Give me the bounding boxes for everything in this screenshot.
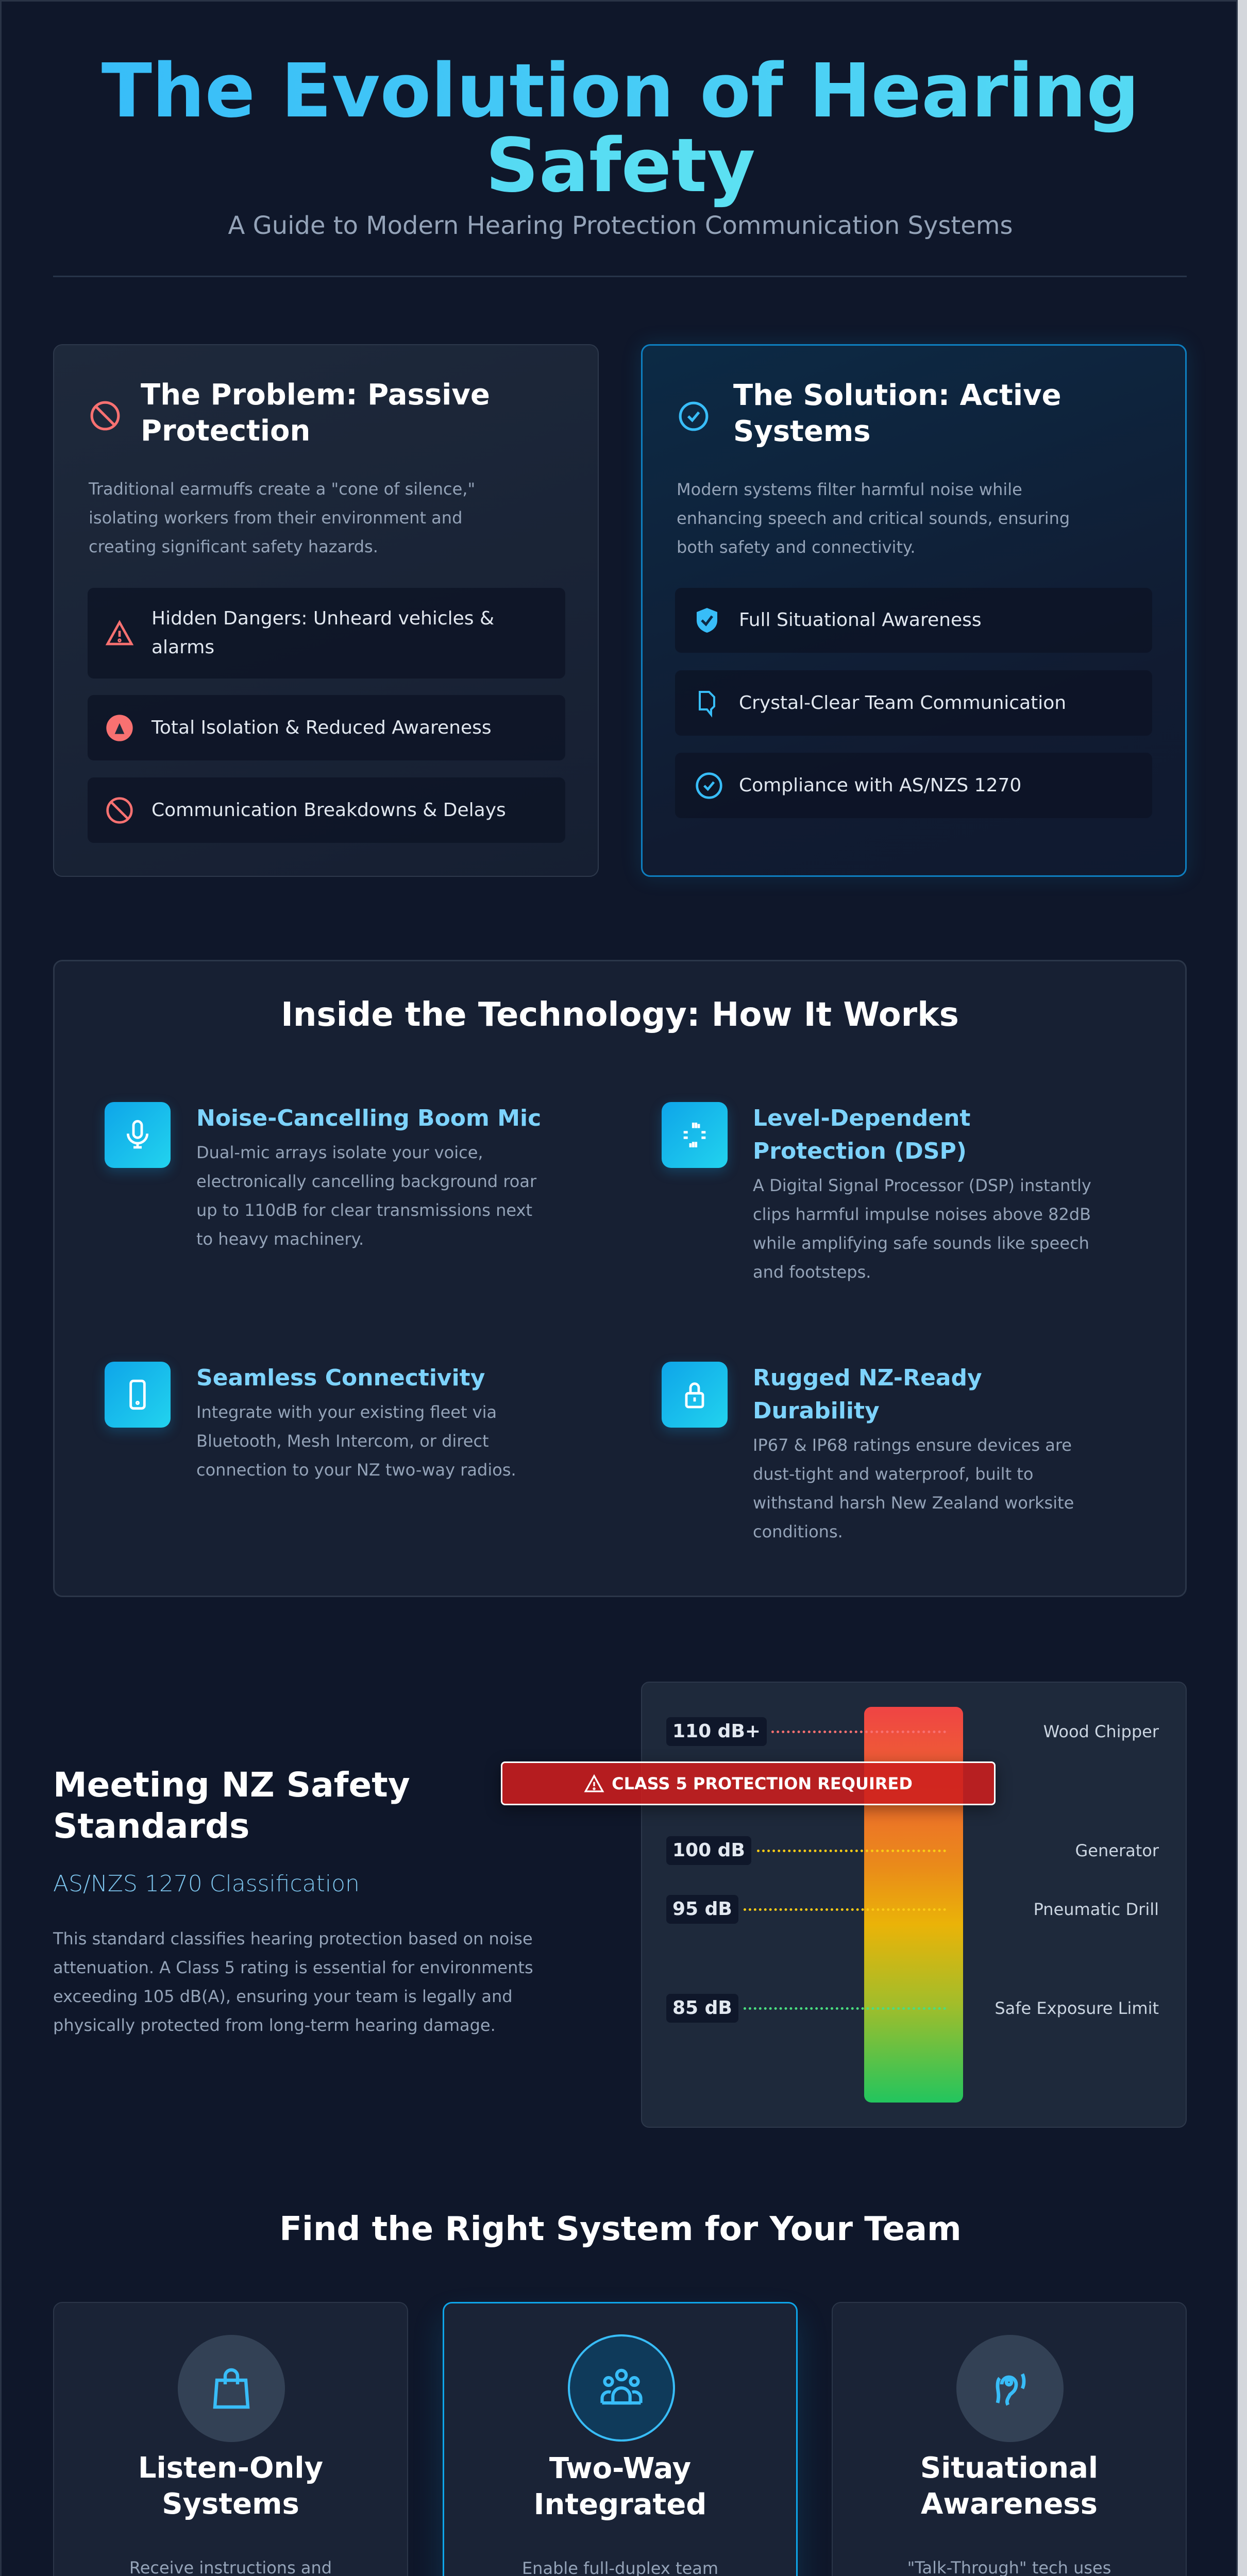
heading: standards: Meeting NZ Safety — [53, 1765, 410, 1805]
tech item: connectivity: connection to your NZ two-way radios. — [196, 1460, 516, 1480]
tech item: durability: conditions. — [753, 1522, 843, 1541]
heading: solution — [733, 379, 1061, 448]
item: isolation: Total Isolation & Reduced Awareness — [151, 717, 492, 738]
tech item: DSP: Level-Dependent — [753, 1105, 970, 1131]
card: two-way: Integrated — [534, 2488, 706, 2521]
label: safe limit: Safe Exposure Limit — [995, 1998, 1159, 2018]
icon: microphone — [105, 1102, 171, 1168]
label: 95 dB: 95 dB — [672, 1899, 732, 1920]
card: situational — [832, 2302, 1187, 2576]
tech item: durability: withstand harsh New Zealand worksite — [753, 1493, 1074, 1513]
heading: solution: The Solution: Active — [733, 379, 1061, 412]
label: pneumatic drill: Pneumatic Drill — [1034, 1900, 1159, 1919]
heading: standards: Standards — [53, 1806, 249, 1846]
label: 100 dB — [666, 1836, 751, 1865]
label: wood chipper: Wood Chipper — [1043, 1722, 1159, 1741]
panel: technology — [53, 960, 1187, 1597]
icon: bag — [178, 2335, 285, 2442]
text: standards description: This standard classifies hearing protection based on noise — [53, 1929, 533, 1948]
tech item: boom mic: to heavy machinery. — [196, 1229, 364, 1249]
tech item: boom mic: Noise-Cancelling Boom Mic — [196, 1105, 541, 1131]
subtitle: A Guide to Modern Hearing Protection Communication Systems — [228, 211, 1013, 240]
item: isolation — [88, 695, 565, 760]
card: listen-only — [53, 2302, 408, 2576]
item: team communication: Crystal-Clear Team Communication — [739, 692, 1066, 713]
tech item: DSP: and footsteps. — [753, 1262, 871, 1282]
icon: team — [568, 2334, 675, 2442]
tech item: durability: IP67 & IP68 ratings ensure devices are — [753, 1435, 1072, 1455]
icon: DSP — [662, 1102, 728, 1168]
heading: problem: The Problem: Passive — [141, 378, 490, 412]
item: compliance: Compliance with AS/NZS 1270 — [739, 775, 1021, 795]
callout: class 5: CLASS 5 PROTECTION REQUIRED — [612, 1773, 913, 1793]
label: 85 dB: 85 dB — [672, 1997, 732, 2019]
panel: solution — [641, 344, 1187, 877]
text: solution description — [677, 480, 1070, 557]
card: listen-only: Listen-Only — [138, 2451, 323, 2485]
label: 100 dB: 100 dB — [672, 1840, 745, 1861]
card: two-way — [443, 2302, 798, 2576]
heading: find system: Find the Right System for Your Team — [279, 2210, 962, 2248]
tech item: DSP: while amplifying safe sounds like speech — [753, 1233, 1089, 1253]
text: problem description: Traditional earmuffs create a "cone of silence," — [89, 479, 475, 499]
tech item: connectivity — [99, 1361, 516, 1480]
tech item: connectivity: Integrate with your existing fleet via — [196, 1402, 497, 1422]
item: compliance — [675, 753, 1152, 818]
tech item: boom mic: Dual-mic arrays isolate your voice, — [196, 1143, 483, 1162]
item: situational awareness: Full Situational Awareness — [739, 609, 982, 631]
icon: check circle — [679, 402, 708, 431]
text: standards description — [53, 1929, 533, 2035]
subheading: classification: AS/NZS 1270 Classification — [53, 1871, 360, 1897]
icon: ear — [956, 2335, 1064, 2442]
heading: solution: Systems — [733, 415, 871, 448]
tech item: durability: Rugged NZ-Ready — [753, 1365, 982, 1391]
text: standards description: exceeding 105 dB(A), ensuring your team is legally and — [53, 1987, 513, 2006]
item: hidden dangers: Hidden Dangers: Unheard vehicles & alarms — [151, 608, 494, 658]
text: problem description — [89, 479, 475, 556]
tech item: durability: dust-tight and waterproof, built to — [753, 1464, 1033, 1484]
card: situational: Awareness — [921, 2487, 1098, 2521]
tech item: DSP: clips harmful impulse noises above 82dB — [753, 1205, 1091, 1224]
tech item: DSP: A Digital Signal Processor (DSP) instantly — [753, 1176, 1091, 1195]
tech item: durability — [656, 1361, 1074, 1541]
chart: decibel scale — [641, 1682, 1187, 2128]
text: solution description: both safety and connectivity. — [677, 537, 916, 557]
card: two-way: Two-Way — [549, 2452, 691, 2485]
title — [102, 47, 1139, 209]
heading: problem: Protection — [141, 414, 310, 448]
tech item: connectivity: Seamless Connectivity — [196, 1365, 485, 1391]
item: team communication — [675, 670, 1152, 736]
panel: problem — [53, 344, 599, 877]
heading: problem — [141, 378, 490, 448]
text: problem description: creating significant safety hazards. — [89, 537, 378, 556]
text: solution description: Modern systems filter harmful noise while — [677, 480, 1022, 499]
bar: gradient meter — [864, 1707, 963, 2103]
tech item: DSP — [656, 1101, 1091, 1282]
tech item: boom mic — [99, 1101, 541, 1249]
item: situational awareness — [675, 588, 1152, 653]
tech item: boom mic: electronically cancelling background roar — [196, 1172, 536, 1191]
callout: class 5 — [501, 1761, 996, 1805]
tech item: boom mic: up to 110dB for clear transmissions next — [196, 1200, 532, 1220]
icon: prohibited — [91, 401, 120, 431]
text: problem description: isolating workers from their environment and — [89, 508, 462, 528]
heading: standards — [53, 1765, 410, 1846]
title: The Evolution of Hearing — [102, 47, 1139, 134]
text: standards description: physically protected from long-term hearing damage. — [53, 2015, 496, 2035]
label: 85 dB — [666, 1994, 738, 2023]
tech item: durability: Durability — [753, 1398, 880, 1424]
dashed guides — [771, 1731, 946, 1733]
heading: technology: Inside the Technology: How It Works — [281, 996, 959, 1034]
text: standards description: attenuation. A Class 5 rating is essential for environments — [53, 1958, 533, 1977]
item: hidden dangers — [88, 588, 565, 679]
label: 110 dB — [666, 1717, 767, 1746]
icon: phone — [105, 1362, 171, 1428]
text: solution description: enhancing speech and critical sounds, ensuring — [677, 509, 1070, 528]
card: listen-only: Systems — [162, 2487, 299, 2521]
label: 95 dB — [666, 1895, 738, 1924]
tech item: DSP: Protection (DSP) — [753, 1138, 967, 1164]
item: communication breakdowns: Communication Breakdowns & Delays — [151, 800, 506, 820]
label: 110 dB: 110 dB+ — [672, 1721, 761, 1742]
item: communication breakdowns — [88, 777, 565, 843]
title: Safety — [485, 122, 755, 209]
icon: lock — [662, 1362, 728, 1428]
tech item: connectivity: Bluetooth, Mesh Intercom, or direct — [196, 1431, 489, 1451]
card: situational: Situational — [920, 2451, 1098, 2485]
label: generator: Generator — [1075, 1841, 1159, 1860]
